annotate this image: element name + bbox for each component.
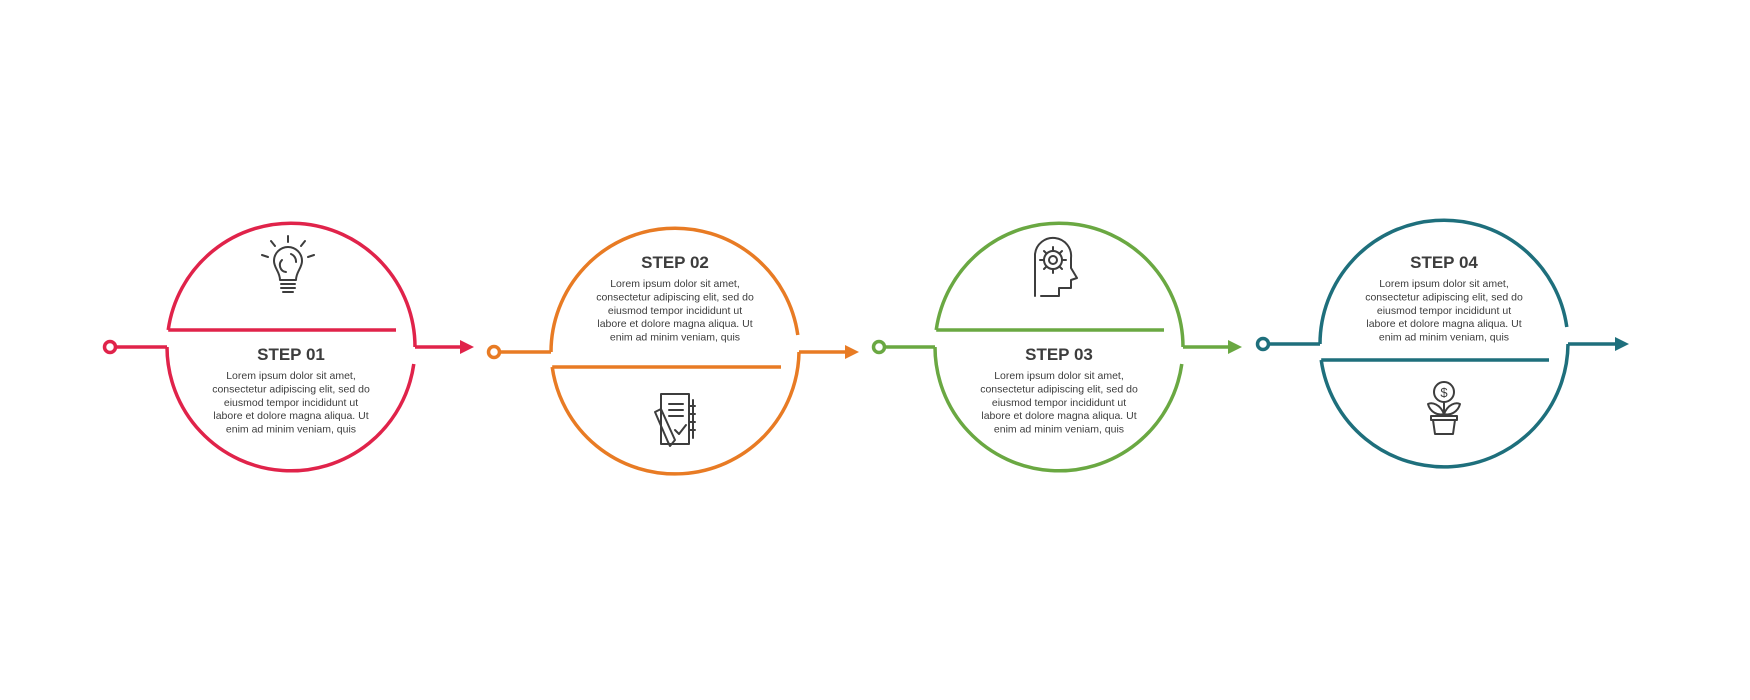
step 4 body text: Lorem ipsum dolor sit amet, (1379, 278, 1509, 290)
step 1 body text: consectetur adipiscing elit, sed do (212, 383, 370, 395)
step 1 body text: labore et dolore magna aliqua. Ut (213, 410, 369, 422)
step 3 body text: consectetur adipiscing elit, sed do (980, 383, 1138, 395)
step 1 body text: Lorem ipsum dolor sit amet, (226, 370, 356, 382)
step 3 title: STEP 03 (1025, 345, 1093, 364)
step 4 connector (1258, 338, 1320, 350)
icon: head with gear (1035, 238, 1077, 296)
icon: money plant (1428, 382, 1460, 434)
step 3 arrow (1183, 340, 1242, 354)
step 4 arrow (1568, 337, 1629, 351)
step 3 body text: enim ad minim veniam, quis (994, 424, 1124, 436)
step 1 arrow (415, 340, 474, 354)
step 3 (874, 223, 1242, 471)
step 4 body text: enim ad minim veniam, quis (1379, 332, 1509, 344)
step 3 circle (935, 223, 1183, 471)
step 2 body text: eiusmod tempor incididunt ut (608, 305, 742, 317)
step 1 connector (104, 342, 167, 352)
step 2 arrow (799, 345, 859, 359)
icon: money plant: $ (1440, 385, 1448, 400)
step 3 body text: eiusmod tempor incididunt ut (992, 397, 1126, 409)
step 1 body text: enim ad minim veniam, quis (226, 424, 356, 436)
step 1 circle (167, 223, 415, 471)
step 4 (1258, 220, 1629, 467)
step 2 body text: labore et dolore magna aliqua. Ut (597, 318, 753, 330)
step 4 body text: consectetur adipiscing elit, sed do (1365, 291, 1523, 303)
step 3 body text: labore et dolore magna aliqua. Ut (981, 410, 1137, 422)
step 4 circle (1320, 220, 1568, 467)
step 2 body text: enim ad minim veniam, quis (610, 332, 740, 344)
icon: light bulb (262, 236, 314, 292)
step 2 body text: consectetur adipiscing elit, sed do (596, 291, 754, 303)
step 3 connector (874, 342, 935, 352)
step 2 circle (551, 228, 799, 474)
step 3 body text: Lorem ipsum dolor sit amet, (994, 370, 1124, 382)
step 4 title: STEP 04 (1410, 253, 1478, 272)
step 2 title: STEP 02 (641, 253, 709, 272)
step 1 title: STEP 01 (257, 345, 325, 364)
icon: document with pen (655, 394, 695, 446)
step 4 body text: labore et dolore magna aliqua. Ut (1366, 318, 1522, 330)
step 1 (104, 223, 474, 471)
step 2 body text: Lorem ipsum dolor sit amet, (610, 278, 740, 290)
step 1 body text: eiusmod tempor incididunt ut (224, 397, 358, 409)
step 2 (488, 228, 859, 474)
step 4 body text: eiusmod tempor incididunt ut (1377, 305, 1511, 317)
step 2 connector (488, 346, 551, 358)
